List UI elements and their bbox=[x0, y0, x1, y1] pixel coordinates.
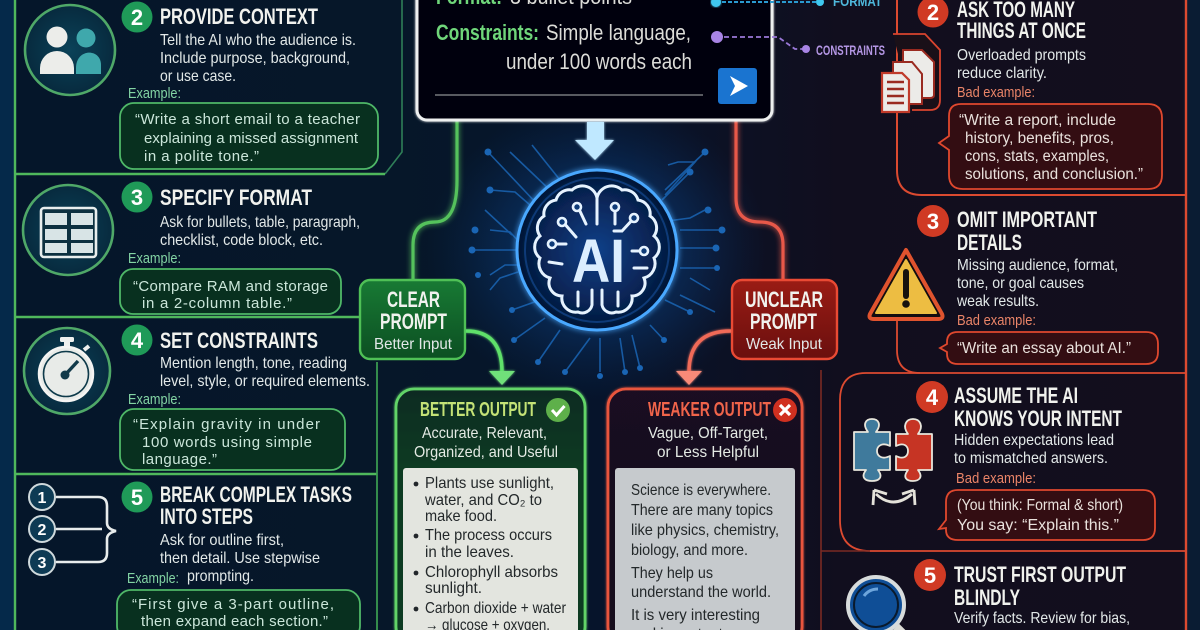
bad example bubble: solutions, and conclusion.” bbox=[965, 166, 1143, 183]
output card: The process occurs bbox=[425, 527, 552, 544]
description bbox=[954, 432, 1114, 467]
description: then detail. Use stepwise bbox=[160, 550, 320, 567]
example bubble: “Explain gravity in under bbox=[133, 416, 320, 433]
output card: Chlorophyll absorbs bbox=[425, 564, 558, 581]
heading: ASSUME THE AI bbox=[954, 383, 1078, 408]
description: Hidden expectations lead bbox=[954, 432, 1114, 449]
mistake 2: ask too many things bbox=[882, 0, 1162, 189]
bad example bubble: “Write an essay about AI.” bbox=[957, 340, 1131, 357]
description bbox=[160, 355, 370, 390]
icon: stopwatch bbox=[24, 328, 110, 414]
bad example bubble: You say: “Explain this.” bbox=[957, 517, 1119, 534]
label: unclear prompt: Weak Input bbox=[746, 336, 823, 353]
heading: SET CONSTRAINTS bbox=[160, 328, 318, 353]
example bubble bbox=[120, 409, 345, 470]
mistake 5: trust first output bbox=[848, 559, 1130, 630]
AI brain emblem bbox=[517, 170, 677, 330]
example bubble bbox=[117, 590, 360, 630]
description: prompting. bbox=[187, 568, 254, 585]
number badge 3 bbox=[917, 205, 949, 237]
heading: PROVIDE CONTEXT bbox=[160, 4, 318, 29]
subtitle: Accurate, Relevant, bbox=[422, 425, 547, 442]
arrow: prompt to AI bbox=[575, 122, 614, 160]
arrow: unclear to weaker output bbox=[676, 331, 731, 385]
heading: SPECIFY FORMAT bbox=[160, 185, 312, 210]
description bbox=[160, 32, 356, 85]
description: Missing audience, format, bbox=[957, 257, 1118, 274]
bad example bubble bbox=[940, 332, 1158, 364]
example bubble: language.” bbox=[142, 451, 217, 468]
icon: people bbox=[25, 5, 115, 95]
description: tone, or goal causes bbox=[957, 275, 1084, 292]
subtitle: Organized, and Useful bbox=[414, 444, 558, 461]
heading bbox=[954, 383, 1122, 431]
description bbox=[160, 532, 320, 585]
AI letters: AI bbox=[572, 227, 625, 295]
description: checklist, code block, etc. bbox=[160, 232, 323, 249]
example bubble: in a 2-column table.” bbox=[142, 295, 292, 312]
example bubble: explaining a missed assignment bbox=[144, 130, 359, 147]
output card: make food. bbox=[425, 508, 497, 525]
number badge 4: 4 bbox=[131, 328, 144, 353]
output card: understand the world. bbox=[631, 584, 771, 601]
heading: WEAKER OUTPUT bbox=[648, 399, 771, 421]
number badge 2: 2 bbox=[927, 0, 939, 25]
description: weak results. bbox=[956, 293, 1039, 310]
bad example label: Bad example: bbox=[957, 85, 1035, 101]
icon: numbered steps bracket: 3 bbox=[38, 555, 47, 572]
number badge 2 bbox=[122, 2, 152, 32]
send button bbox=[718, 68, 757, 104]
heading: TRUST FIRST OUTPUT bbox=[954, 562, 1126, 587]
number badge 5 bbox=[122, 482, 152, 512]
label: clear prompt: Better Input bbox=[374, 336, 453, 353]
icon: check bbox=[546, 398, 570, 422]
arrow: clear to better output bbox=[466, 331, 515, 385]
description: Tell the AI who the audience is. bbox=[160, 32, 356, 49]
icon: numbered steps bracket: 1 bbox=[38, 490, 47, 507]
bad example bubble: cons, stats, examples, bbox=[965, 148, 1109, 165]
example bubble bbox=[120, 269, 341, 314]
panel: weaker output bbox=[608, 389, 802, 630]
number badge 4: 4 bbox=[926, 385, 939, 410]
heading bbox=[957, 207, 1097, 255]
prompt box: Simple language, bbox=[546, 20, 691, 45]
bad example bubble: “Write a report, include bbox=[959, 112, 1116, 129]
label: unclear prompt bbox=[732, 280, 837, 359]
description: to mismatched answers. bbox=[954, 450, 1108, 467]
number badge 5: 5 bbox=[131, 485, 143, 510]
heading: KNOWS YOUR INTENT bbox=[954, 406, 1122, 431]
bad example bubble: (You think: Formal & short) bbox=[957, 497, 1123, 514]
output card: water, and CO₂ to bbox=[424, 492, 542, 509]
annotation: format bbox=[711, 0, 882, 9]
description: reduce clarity. bbox=[957, 65, 1047, 82]
circuit nodes bbox=[468, 148, 726, 379]
output card: in the leaves. bbox=[425, 544, 514, 561]
description: Include purpose, background, bbox=[160, 50, 350, 67]
description: or use case. bbox=[160, 68, 236, 85]
heading: BREAK COMPLEX TASKS bbox=[160, 482, 352, 507]
icon: magnifying glass bbox=[848, 577, 914, 630]
description: Verify facts. Review for bias, bbox=[954, 610, 1130, 627]
step 2: provide context bbox=[25, 2, 378, 169]
heading: THINGS AT ONCE bbox=[957, 18, 1086, 43]
icon: stacked documents bbox=[882, 34, 940, 112]
number badge 5 bbox=[914, 559, 946, 591]
label: clear prompt: CLEAR bbox=[387, 287, 440, 312]
subtitle bbox=[414, 425, 558, 461]
step 5: break complex tasks bbox=[29, 482, 360, 630]
subtitle: Vague, Off-Target, bbox=[648, 425, 768, 442]
description: Mention length, tone, reading bbox=[160, 355, 347, 372]
output card: biology, and more. bbox=[631, 542, 748, 559]
label: clear prompt: PROMPT bbox=[380, 309, 447, 334]
number badge 3: 3 bbox=[131, 185, 143, 210]
example bubble: “Compare RAM and storage bbox=[133, 278, 328, 295]
icon: cross bbox=[773, 398, 797, 422]
prompt box: Constraints: bbox=[436, 20, 539, 45]
number badge 4 bbox=[916, 381, 948, 413]
example bubble: 100 words using simple bbox=[142, 434, 312, 451]
number badge 2: 2 bbox=[131, 5, 143, 30]
icon: brain outline bbox=[535, 186, 659, 313]
annotation: constraints bbox=[711, 31, 885, 58]
output card: They help us bbox=[631, 565, 713, 582]
heading: BETTER OUTPUT bbox=[420, 399, 536, 421]
heading bbox=[957, 0, 1086, 43]
number badge 3 bbox=[122, 182, 152, 212]
icon: warning triangle bbox=[870, 250, 942, 319]
heading: BLINDLY bbox=[954, 585, 1020, 610]
circuit traces bbox=[475, 145, 722, 372]
label: unclear prompt: PROMPT bbox=[750, 309, 817, 334]
bad example label: Bad example: bbox=[957, 313, 1036, 329]
step 4: set constraints bbox=[24, 324, 370, 470]
output card: Science is everywhere. bbox=[631, 482, 771, 499]
icon: table bbox=[23, 185, 113, 275]
output card: sunlight. bbox=[425, 580, 482, 597]
prompt box: under 100 words each bbox=[506, 49, 692, 74]
heading bbox=[160, 482, 352, 529]
bad example bubble bbox=[939, 104, 1162, 189]
step 3: specify format bbox=[23, 182, 360, 314]
output card bbox=[615, 468, 795, 630]
subtitle: or Less Helpful bbox=[657, 444, 759, 461]
bad example label: Bad example: bbox=[956, 471, 1036, 487]
connector: prompt to clear label bbox=[413, 118, 457, 282]
panel: left column frames bbox=[15, 0, 402, 630]
description: Ask for bullets, table, paragraph, bbox=[160, 214, 360, 231]
bad example bubble bbox=[939, 490, 1155, 540]
description: Overloaded prompts bbox=[957, 47, 1086, 64]
output card: Carbon dioxide + water bbox=[425, 600, 567, 617]
example label: Example: bbox=[128, 251, 181, 267]
example label: Example: bbox=[128, 86, 181, 102]
icon: numbered steps bracket: 2 bbox=[38, 522, 47, 539]
example bubble: “Write a short email to a teacher bbox=[135, 111, 360, 128]
prompt box bbox=[417, 0, 772, 120]
number badge 5: 5 bbox=[924, 563, 936, 588]
number badge 4 bbox=[122, 324, 152, 356]
number badge 2 bbox=[918, 0, 948, 28]
label: unclear prompt: UNCLEAR bbox=[745, 287, 823, 312]
icon: numbered steps bracket bbox=[29, 484, 116, 575]
description: Ask for outline first, bbox=[160, 532, 284, 549]
panel: better output bbox=[396, 389, 585, 630]
output card: like physics, chemistry, bbox=[631, 522, 779, 539]
output card bbox=[403, 468, 578, 630]
description bbox=[957, 47, 1086, 82]
heading: INTO STEPS bbox=[160, 504, 253, 529]
panel: right column frames bbox=[821, 0, 1186, 630]
description bbox=[956, 257, 1118, 310]
example bubble bbox=[120, 103, 378, 169]
output card: Plants use sunlight, bbox=[425, 475, 554, 492]
connector: prompt to unclear label bbox=[736, 118, 783, 282]
output card: It is very interesting bbox=[631, 607, 760, 624]
number badge 3: 3 bbox=[927, 209, 939, 234]
example bubble: then expand each section.” bbox=[141, 613, 328, 630]
description bbox=[160, 214, 360, 249]
example bubble: “First give a 3-part outline, bbox=[132, 596, 334, 613]
label: clear prompt bbox=[360, 280, 465, 359]
mistake 4: assume the AI knows bbox=[854, 381, 1155, 540]
example label: Example: bbox=[128, 392, 181, 408]
description: level, style, or required elements. bbox=[160, 373, 370, 390]
heading: DETAILS bbox=[957, 230, 1022, 255]
heading: OMIT IMPORTANT bbox=[957, 207, 1097, 232]
output card: There are many topics bbox=[631, 502, 773, 519]
bad example bubble: history, benefits, pros, bbox=[965, 130, 1114, 147]
subtitle bbox=[648, 425, 768, 461]
heading bbox=[954, 562, 1126, 610]
example label: Example: bbox=[127, 571, 179, 587]
icon: puzzle pieces bbox=[854, 419, 932, 505]
mistake 3: omit important details bbox=[870, 205, 1158, 364]
annotation: constraints: CONSTRAINTS bbox=[816, 42, 885, 58]
example bubble: in a polite tone.” bbox=[144, 148, 259, 165]
